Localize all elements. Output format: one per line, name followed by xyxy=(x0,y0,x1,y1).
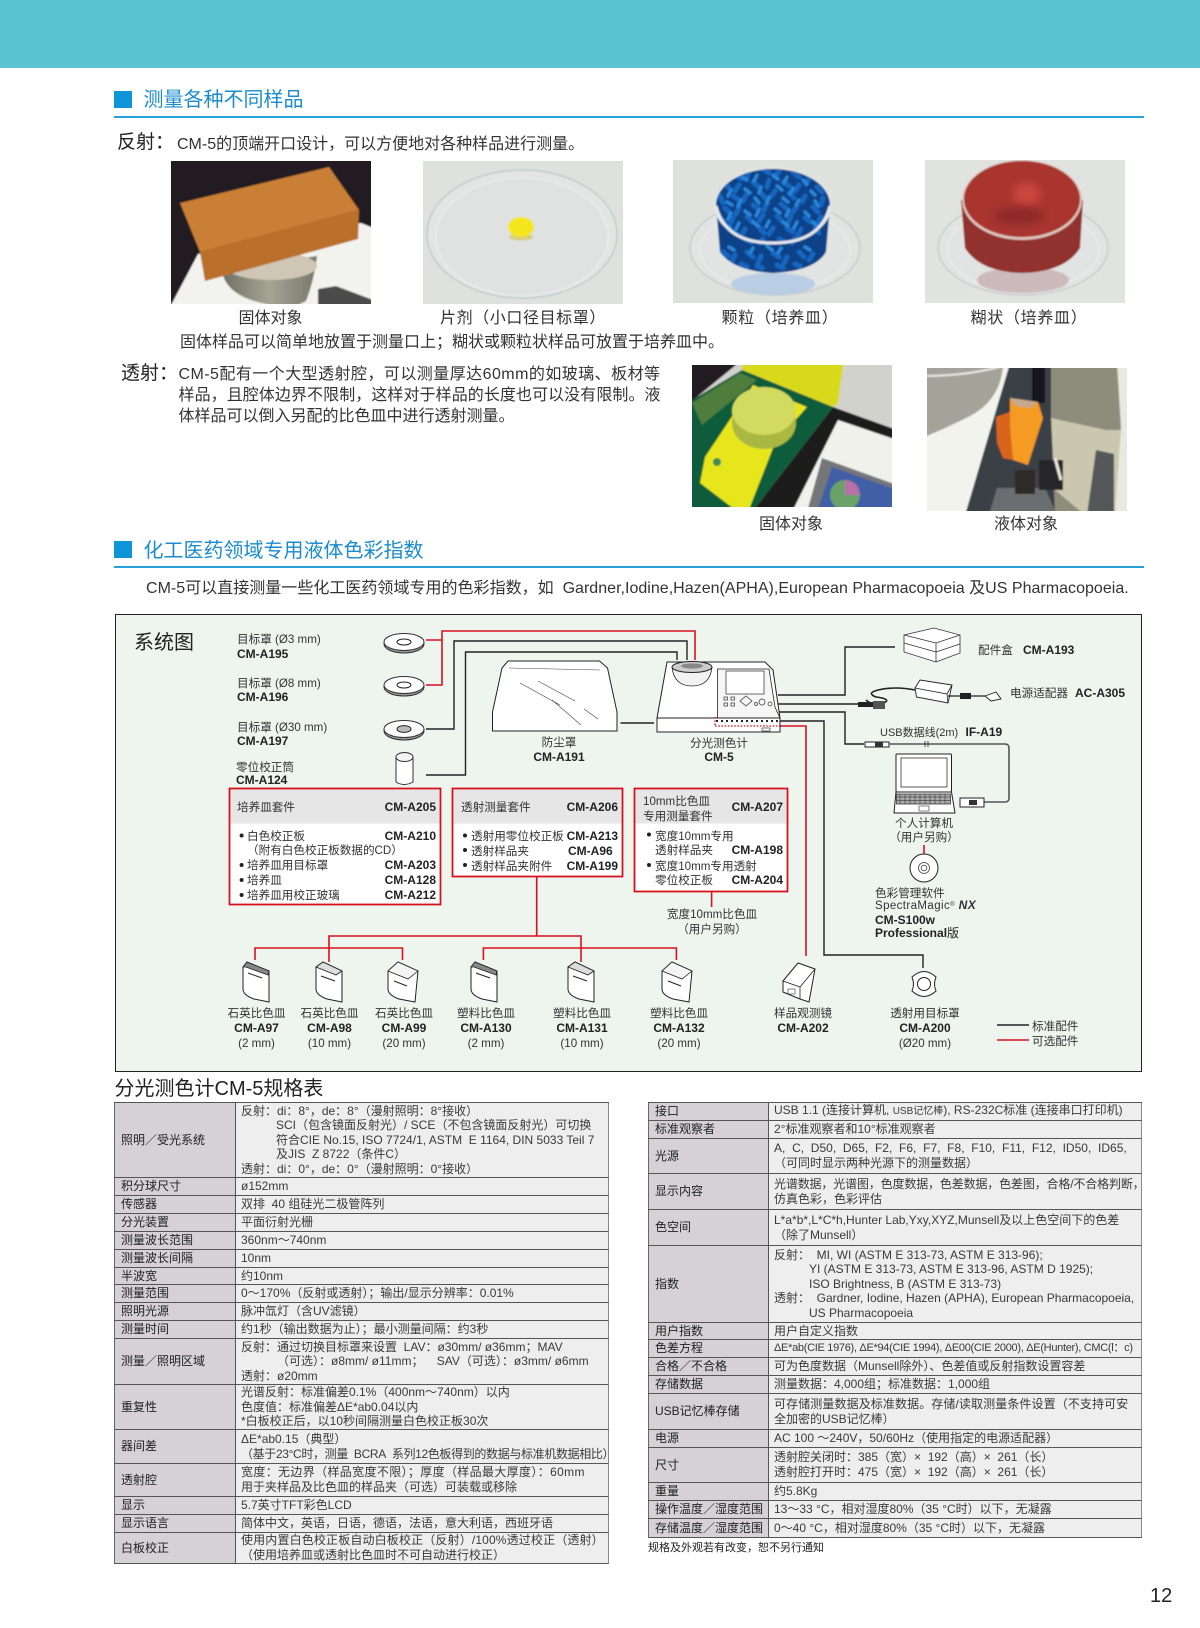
row: 显示语言 xyxy=(121,1516,169,1530)
cell: CM-A131: (10 mm) xyxy=(560,1037,604,1050)
row: L*a*b*,L*C*h,Hunter Lab,Yxy,XYZ,Munsell及以上色空间下的色差 xyxy=(774,1213,1119,1227)
section heading: liquid colour indices xyxy=(114,540,1144,568)
row xyxy=(114,1533,609,1564)
row: 指数 xyxy=(655,1277,679,1291)
row: 透射腔关闭时：385（宽）× 192（高）× 261（长） xyxy=(774,1450,1053,1464)
label: 10mm cells user supplied: （用户另购） xyxy=(677,922,747,936)
row xyxy=(648,1501,1142,1519)
row xyxy=(114,1321,609,1339)
row: 透射：di：0°，de：0°（漫射照明：0°接收） xyxy=(241,1162,478,1176)
cell: CM-A97: 石英比色皿 xyxy=(228,1006,286,1020)
photo captions: 颗粒（培养皿） xyxy=(722,310,838,327)
footnote: 规格及外观若有改变，恕不另行通知 xyxy=(648,1542,824,1554)
row: （使用培养皿或透射比色皿时不可自动进行校正） xyxy=(241,1548,505,1562)
row xyxy=(648,1210,1142,1246)
row: 10nm xyxy=(241,1251,271,1265)
row xyxy=(648,1430,1142,1448)
row: （除了Munsell） xyxy=(774,1228,863,1242)
cell: CM-A130: 塑料比色皿 xyxy=(457,1006,515,1020)
row: （基于23°C时，测量 BCRA 系列12色板得到的数据与标准机数据相比） xyxy=(241,1446,614,1460)
specification table: left xyxy=(114,1102,609,1564)
row: SCI（包含镜面反射光）/ SCE（不包含镜面反射光）可切换 xyxy=(276,1118,591,1132)
kit box: petri dish kit xyxy=(230,788,440,904)
kit box: transmittance kit: CM-A213 xyxy=(567,829,618,843)
transmission captions xyxy=(759,515,1058,533)
photo captions: 糊状（培养皿） xyxy=(971,310,1087,327)
photo captions: 片剂（小口径目标罩） xyxy=(440,310,606,327)
icon: sample viewer xyxy=(774,963,832,1035)
photo captions: 固体对象 xyxy=(238,310,303,327)
icon: transmission target mask xyxy=(890,972,960,1050)
row: 透射： Gardner, Iodine, Hazen (APHA), European Pharmacopoeia, xyxy=(774,1291,1134,1305)
row: 用户指数 xyxy=(655,1324,703,1338)
kit box: 10mm cell kit: 宽度10mm专用 xyxy=(655,829,734,843)
section heading: samples: 测量各种不同样品 xyxy=(144,89,304,111)
icon: personal computer: （用户另购） xyxy=(889,830,959,844)
icon: CM-5 spectrophotometer xyxy=(657,662,780,764)
row: 测量波长范围 xyxy=(121,1233,193,1247)
kit box: petri dish kit: 培养皿套件 xyxy=(237,800,295,814)
kit box: petri dish kit: 培养皿 xyxy=(247,873,282,887)
cell: CM-A130 xyxy=(457,962,515,1050)
icon: dust cover: 防尘罩 xyxy=(542,735,576,749)
software label xyxy=(875,886,977,940)
text: transmission: 样品，且腔体边界不限制，这样对于样品的长度也可以没有限制。液 xyxy=(178,387,661,404)
row xyxy=(114,1515,609,1533)
row: 0～170%（反射或透射）；输出/显示分辨率：0.01% xyxy=(241,1286,514,1300)
row: 简体中文，英语，日语，德语，法语，意大利语，西班牙语 xyxy=(241,1516,553,1530)
row xyxy=(114,1303,609,1321)
row: 13～33 °C，相对湿度80%（35 °C时）以下，无凝露 xyxy=(774,1502,1052,1516)
row: 白板校正 xyxy=(121,1541,169,1555)
cell: CM-A99 xyxy=(375,962,433,1050)
text: sample placement note: 固体样品可以简单地放置于测量口上；糊状或颗粒状样品可放置于培养皿中。 xyxy=(180,334,724,351)
row: 使用内置白色校正板自动白板校正（反射）/100%透过校正（透射） xyxy=(241,1533,604,1547)
row xyxy=(114,1196,609,1214)
row: 分光装置 xyxy=(121,1215,169,1229)
row: 符合CIE No.15, ISO 7724/1, ASTM E 1164, DIN 5033 Teil 7 xyxy=(276,1133,594,1147)
kit box: petri dish kit: CM-A205 xyxy=(385,800,436,814)
cell: CM-A132: (20 mm) xyxy=(657,1037,701,1050)
row: 全加密的USB记忆棒） xyxy=(774,1412,895,1426)
section heading: samples xyxy=(114,88,1144,118)
cell: CM-A97: CM-A97 xyxy=(234,1021,279,1035)
kit box: 10mm cell kit: 专用测量套件 xyxy=(643,809,713,823)
transmission captions: 液体对象 xyxy=(994,516,1058,533)
row: ISO Brightness, B (ASTM E 313-73) xyxy=(809,1277,1001,1291)
row: 可存储测量数据及标准数据。存储/读取测量条件设置（不支持可安 xyxy=(774,1397,1128,1411)
row: 光谱数据，光谱图，色度数据，色差数据，色差图，合格/不合格判断， xyxy=(774,1177,1145,1191)
row: 显示 xyxy=(121,1498,145,1512)
kit box: petri dish kit: CM-A212 xyxy=(385,888,436,902)
row: 测量时间 xyxy=(121,1322,169,1336)
row: 显示内容 xyxy=(655,1184,703,1198)
row: 2°标准观察者和10°标准观察者 xyxy=(774,1122,936,1136)
row: 光谱反射：标准偏差0.1%（400nm～740nm）以内 xyxy=(241,1385,510,1399)
label: 10mm cells user supplied: 宽度10mm比色皿 xyxy=(667,907,757,921)
accessory: target mask 8mm xyxy=(237,676,424,704)
icon: USB cable: USB数据线(2m) xyxy=(880,725,958,739)
kit box: petri dish kit: CM-A128 xyxy=(385,873,436,887)
row xyxy=(648,1323,1142,1340)
accessory: target mask 30mm: 目标罩 (Ø30 mm) xyxy=(237,721,327,734)
cell: CM-A98: (10 mm) xyxy=(308,1037,351,1050)
row xyxy=(114,1103,609,1178)
kit box: petri dish kit: 培养皿用校正玻璃 xyxy=(247,888,340,902)
row: 合格／不合格 xyxy=(655,1359,727,1373)
kit box: petri dish kit: 白色校正板 xyxy=(247,829,305,843)
row: （可选）：ø8mm/ ø11mm； SAV（可选）：ø3mm/ ø6mm xyxy=(277,1354,589,1368)
row xyxy=(114,1285,609,1303)
cell: CM-A132 xyxy=(650,962,708,1050)
software label: ® xyxy=(950,901,955,908)
kit box: petri dish kit: 培养皿用目标罩 xyxy=(247,858,328,872)
cell: CM-A132: CM-A132 xyxy=(653,1021,705,1035)
photo: granules xyxy=(673,160,873,303)
row: 重量 xyxy=(655,1484,679,1498)
row: 测量范围 xyxy=(121,1286,169,1300)
row xyxy=(114,1497,609,1515)
row: 360nm～740nm xyxy=(241,1233,326,1247)
kit box: transmittance kit: 透射样品夹附件 xyxy=(471,859,553,873)
row: 及JIS Z 8722（条件C） xyxy=(276,1147,406,1161)
icon: AC adapter: AC-A305 xyxy=(1075,686,1125,700)
accessory: zero calibration tube: 零位校正筒 xyxy=(236,760,294,774)
accessory: zero calibration tube xyxy=(236,752,413,787)
accessory: target mask 3mm xyxy=(237,633,424,661)
icon: software CD xyxy=(910,854,938,882)
row: 脉冲氙灯（含UV滤镜） xyxy=(241,1304,366,1318)
kit box: 10mm cell kit: 10mm比色皿 xyxy=(643,794,710,808)
panel title: 系统图 xyxy=(134,631,194,654)
row xyxy=(114,1339,609,1385)
row xyxy=(648,1519,1142,1538)
row: USB 1.1 (连接计算机, USB记忆棒), RS-232C标准 (连接串口打印机) xyxy=(774,1103,1123,1117)
cell: CM-A97: (2 mm) xyxy=(238,1037,275,1050)
text: transmission: CM-5配有一个大型透射腔，可以测量厚达60mm的如玻璃、板材等 xyxy=(178,366,660,383)
row: 5.7英寸TFT彩色LCD xyxy=(241,1498,352,1512)
row: 操作温度／湿度范围 xyxy=(655,1502,763,1516)
accessory: target mask 3mm: 目标罩 (Ø3 mm) xyxy=(237,633,321,646)
icon: CM-5 spectrophotometer: 分光测色计 xyxy=(690,736,748,750)
icon: CM-5 spectrophotometer: CM-5 xyxy=(704,750,734,764)
row: 透射腔打开时：475（宽）× 192（高）× 261（长） xyxy=(774,1465,1053,1479)
row: 色空间 xyxy=(655,1220,691,1234)
photo: solid object xyxy=(171,161,371,304)
kit box: petri dish kit: CM-A203 xyxy=(385,858,436,872)
cell: CM-A131: 塑料比色皿 xyxy=(553,1006,611,1020)
cell: CM-A131 xyxy=(553,962,611,1050)
kit box: 10mm cell kit: CM-A207 xyxy=(732,800,783,814)
kit box: transmittance kit: CM-A199 xyxy=(567,859,618,873)
icon: accessory case xyxy=(904,628,1075,662)
photo: tablet xyxy=(423,161,623,304)
row: 仿真色彩，色彩评估 xyxy=(774,1192,882,1206)
icon: dust cover xyxy=(492,661,617,764)
row: 电源 xyxy=(655,1431,679,1445)
cell: CM-A98: CM-A98 xyxy=(307,1021,352,1035)
cell: CM-A99: CM-A99 xyxy=(382,1021,427,1035)
row: 器间差 xyxy=(121,1439,157,1453)
accessory: target mask 8mm: 目标罩 (Ø8 mm) xyxy=(237,677,321,690)
row: 宽度：无边界（样品宽度不限）；厚度（样品最大厚度）：60mm xyxy=(241,1465,585,1479)
row xyxy=(648,1340,1142,1358)
software label: NX xyxy=(955,898,977,912)
row: 存储数据 xyxy=(655,1377,703,1391)
row: 照明光源 xyxy=(121,1304,169,1318)
row: 用于夹样品及比色皿的样品夹（可选）可装载或移除 xyxy=(241,1480,517,1494)
accessory: target mask 30mm: CM-A197 xyxy=(237,734,289,748)
row: 标准观察者 xyxy=(655,1122,715,1136)
kit box: transmittance kit: 透射用零位校正板 xyxy=(471,829,564,843)
page number: 12 xyxy=(1150,1585,1172,1607)
cell: CM-A98 xyxy=(301,962,359,1050)
row: 用户自定义指数 xyxy=(774,1324,858,1338)
text: transmission: 体样品可以倒入另配的比色皿中进行透射测量。 xyxy=(178,408,515,425)
row xyxy=(114,1178,609,1196)
row: 测量数据：4,000组；标准数据：1,000组 xyxy=(774,1377,990,1391)
row: 反射：di：8°，de：8°（漫射照明：8°接收） xyxy=(241,1104,478,1118)
row: 接口 xyxy=(655,1104,679,1118)
row xyxy=(648,1358,1142,1376)
panel background xyxy=(116,614,1142,1072)
row xyxy=(114,1385,609,1430)
kit box: transmittance kit: CM-A206 xyxy=(567,800,618,814)
icon: AC adapter: 电源适配器 xyxy=(1010,686,1068,700)
text: transmission xyxy=(121,363,661,425)
row: *白板校正后，以10秒间隔测量白色校正板30次 xyxy=(241,1414,488,1428)
cell: CM-A99: 石英比色皿 xyxy=(375,1006,433,1020)
row: 传感器 xyxy=(121,1197,157,1211)
row: YI (ASTM E 313-73, ASTM E 313-96, ASTM D 1925); xyxy=(809,1262,1093,1276)
kit box: 10mm cell kit: CM-A198 xyxy=(732,843,783,857)
icon: USB cable: IF-A19 xyxy=(966,725,1002,739)
row: 光源 xyxy=(655,1149,679,1163)
row: A, C, D50, D65, F2, F6, F7, F8, F10, F11, F12, ID50, ID65, xyxy=(774,1141,1127,1155)
specification table title: 分光测色计CM-5规格表 xyxy=(114,1078,323,1100)
specification table: right xyxy=(648,1102,1142,1538)
row: ΔE*ab0.15（典型） xyxy=(241,1432,346,1446)
photo: liquid transmission xyxy=(927,368,1127,511)
transmission captions: 固体对象 xyxy=(759,516,823,533)
kit box: 10mm cell kit: 宽度10mm专用透射 xyxy=(655,859,757,873)
row: 双排 40 组硅光二极管阵列 xyxy=(241,1197,384,1211)
icon: sample viewer: CM-A202 xyxy=(777,1021,829,1035)
row: 色度值：标准偏差ΔE*ab0.04以内 xyxy=(241,1400,418,1414)
accessory: target mask 30mm xyxy=(237,720,424,748)
row xyxy=(648,1103,1142,1121)
row xyxy=(114,1250,609,1268)
row: 测量波长间隔 xyxy=(121,1251,193,1265)
text: reflection intro: CM-5的顶端开口设计，可以方便地对各种样品进行测量。 xyxy=(177,136,584,153)
row xyxy=(648,1376,1142,1394)
accessory: target mask 3mm: CM-A195 xyxy=(237,647,289,661)
row: 透射：ø20mm xyxy=(241,1369,318,1383)
cell: CM-A131: CM-A131 xyxy=(556,1021,608,1035)
software label: 色彩管理软件 xyxy=(875,886,945,900)
row: 0～40 °C，相对湿度80%（35 °C时）以下，无凝露 xyxy=(774,1521,1045,1535)
row: 照明／受光系统 xyxy=(121,1133,205,1147)
photo: paste xyxy=(925,160,1125,303)
row xyxy=(648,1139,1142,1174)
row: 半波宽 xyxy=(121,1269,157,1283)
kit box: transmittance kit: 透射样品夹 xyxy=(471,844,529,858)
accessory: target mask 8mm: CM-A196 xyxy=(237,690,289,704)
kit box: 10mm cell kit: 零位校正板 xyxy=(655,873,713,887)
section heading: liquid colour indices: 化工医药领域专用液体色彩指数 xyxy=(144,540,424,562)
cell: CM-A132: 塑料比色皿 xyxy=(650,1006,708,1020)
row xyxy=(648,1483,1142,1501)
row: 透射腔 xyxy=(121,1473,157,1487)
icon: USB cable xyxy=(865,725,1009,807)
software label: SpectraMagic xyxy=(875,900,950,912)
label: 10mm cells user supplied xyxy=(667,907,757,936)
icon: transmission target mask: CM-A200 xyxy=(899,1021,951,1035)
row xyxy=(648,1394,1142,1430)
icon: personal computer: 个人计算机 xyxy=(895,816,953,830)
text: liquid index intro: CM-5可以直接测量一些化工医药领域专用的色彩指数，如 Gardner,Iodine,Hazen(APHA),European Pharmacopoeia 及US Pharmacopoeia. xyxy=(146,580,1129,597)
connection lines: red optional xyxy=(255,631,924,962)
icon: dust cover: CM-A191 xyxy=(533,750,585,764)
kit box: 10mm cell kit xyxy=(634,788,788,892)
row: ø152mm xyxy=(241,1179,288,1193)
software label: CM-S100w xyxy=(875,913,936,927)
software label: Professional版 xyxy=(875,926,959,940)
row: 存储温度／湿度范围 xyxy=(655,1521,763,1535)
header band xyxy=(0,0,1200,68)
icon: accessory case: CM-A193 xyxy=(1023,643,1075,657)
row: 测量／照明区域 xyxy=(121,1354,205,1368)
legend xyxy=(997,1019,1079,1048)
row: 色差方程 xyxy=(655,1341,703,1355)
row: 约1秒（输出数据为止）；最小测量间隔：约3秒 xyxy=(241,1322,488,1336)
row xyxy=(114,1430,609,1464)
legend: 可选配件 xyxy=(1032,1034,1079,1048)
cell: CM-A99: (20 mm) xyxy=(382,1037,426,1050)
kit box: petri dish kit: CM-A210 xyxy=(385,829,436,843)
row: 约5.8Kg xyxy=(774,1484,817,1498)
row: US Pharmacopoeia xyxy=(809,1306,913,1320)
legend: 标准配件 xyxy=(1032,1019,1079,1033)
icon: personal computer xyxy=(889,754,959,844)
row xyxy=(648,1448,1142,1483)
row: 尺寸 xyxy=(655,1458,679,1472)
kit box: transmittance kit xyxy=(452,788,622,876)
row: 重复性 xyxy=(121,1400,157,1414)
kit box: 10mm cell kit: CM-A204 xyxy=(732,873,783,887)
cell: CM-A98: 石英比色皿 xyxy=(301,1006,359,1020)
row: 平面衍射光栅 xyxy=(241,1215,313,1229)
row xyxy=(648,1121,1142,1139)
row: 反射：通过切换目标罩来设置 LAV：ø30mm/ ø36mm；MAV xyxy=(241,1340,563,1354)
row xyxy=(114,1232,609,1250)
row: （可同时显示两种光源下的测量数据） xyxy=(774,1156,978,1170)
kit box: 10mm cell kit: 透射样品夹 xyxy=(655,843,713,857)
row: ΔE*ab(CIE 1976), ΔE*94(CIE 1994), ΔE00(CIE 2000), ΔE(Hunter), CMC(l：c) xyxy=(774,1342,1133,1354)
icon: transmission target mask: (Ø20 mm) xyxy=(899,1037,951,1050)
cell: CM-A97 xyxy=(228,962,286,1050)
row xyxy=(114,1268,609,1285)
row xyxy=(648,1174,1142,1210)
row xyxy=(114,1464,609,1497)
row xyxy=(114,1214,609,1232)
row: 约10nm xyxy=(241,1269,283,1283)
row: 反射： MI, WI (ASTM E 313-73, ASTM E 313-96); xyxy=(774,1248,1043,1262)
row xyxy=(648,1246,1142,1323)
icon: accessory case: 配件盒 xyxy=(978,643,1013,657)
row: USB记忆棒存储 xyxy=(655,1404,740,1418)
row: 积分球尺寸 xyxy=(121,1179,181,1193)
text: transmission: 透射： xyxy=(121,363,178,384)
cell: CM-A130: (2 mm) xyxy=(468,1037,504,1050)
kit box: petri dish kit: （附有白色校正板数据的CD） xyxy=(247,843,403,857)
kit box: transmittance kit: 透射测量套件 xyxy=(461,800,531,814)
row: 可为色度数据（Munsell除外）、色差值或反射指数设置容差 xyxy=(774,1359,1085,1373)
photo: solid transmission xyxy=(692,365,892,507)
icon: transmission target mask: 透射用目标罩 xyxy=(890,1006,960,1020)
connection lines: black standard xyxy=(426,641,923,968)
cell: CM-A130: CM-A130 xyxy=(460,1021,512,1035)
accessory: zero calibration tube: CM-A124 xyxy=(236,773,288,787)
icon: sample viewer: 样品观测镜 xyxy=(774,1006,832,1020)
row: AC 100 ～240V，50/60Hz（使用指定的电源适配器） xyxy=(774,1431,1058,1445)
photo captions xyxy=(238,309,1087,327)
icon: AC adapter xyxy=(858,680,1125,709)
text: reflection intro: 反射： xyxy=(117,132,174,153)
kit box: transmittance kit: CM-A96 xyxy=(568,844,613,858)
